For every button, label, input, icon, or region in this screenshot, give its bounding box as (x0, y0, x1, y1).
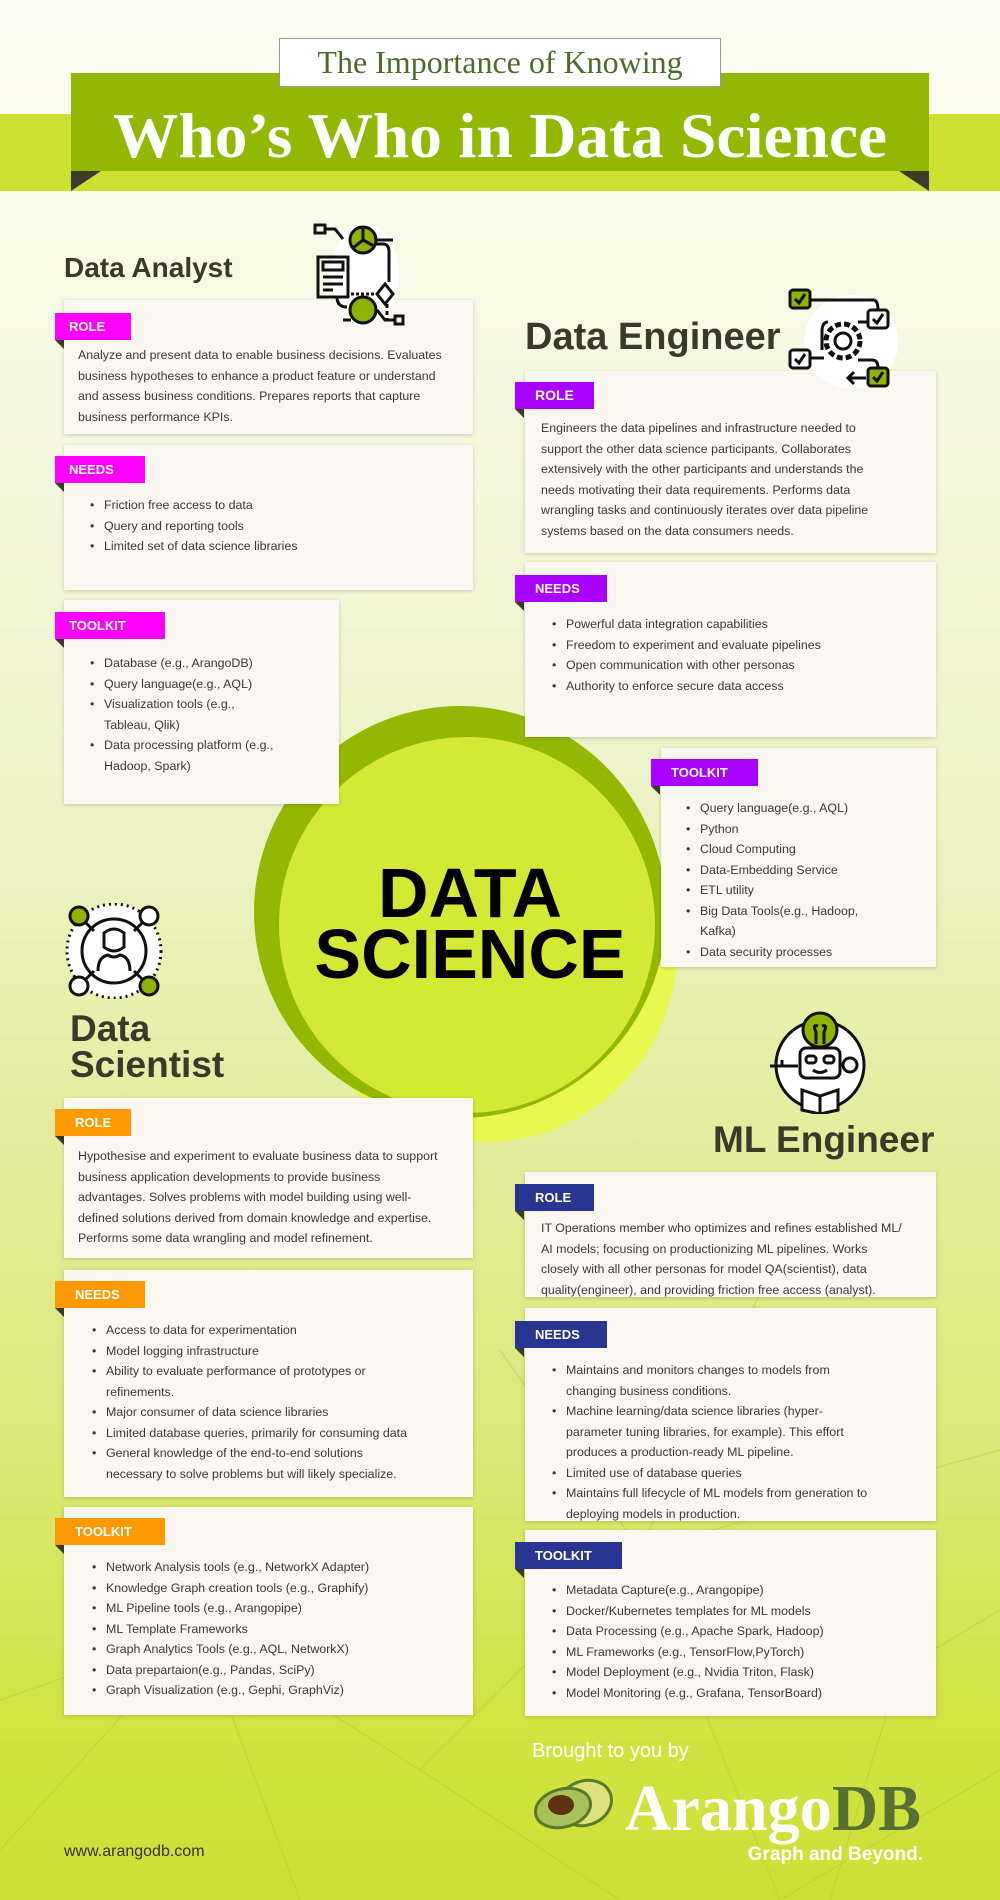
text: scientist role (78, 1149, 438, 1245)
title: Who’s Who in Data Science (113, 100, 887, 171)
tag: scientist role: ROLE (75, 1115, 111, 1130)
list: analyst toolkit: Hadoop, Spark) (104, 758, 191, 772)
text: engineer role: needs motivating their data requirements. Performs data (541, 482, 850, 496)
list: scientist toolkit: Knowledge Graph creation tools (e.g., Graphify) (106, 1580, 368, 1594)
subtitle: The Importance of Knowing (317, 44, 683, 80)
heading: Data Scientist: Scientist (70, 1044, 224, 1085)
list: ML toolkit: Model Deployment (e.g., Nvidia Triton, Flask) (566, 1665, 814, 1679)
tag: ML toolkit: TOOLKIT (535, 1548, 592, 1563)
tag: scientist needs: NEEDS (75, 1287, 120, 1302)
list: ML toolkit: Docker/Kubernetes templates for ML models (566, 1604, 811, 1618)
text: brought to you by: Brought to you by (532, 1740, 689, 1762)
text: engineer role: wrangling tasks and continuously iterates over data pipeline (541, 503, 868, 517)
text: website: www.arangodb.com (64, 1843, 205, 1860)
list: scientist needs: refinements. (106, 1384, 174, 1398)
list: engineer toolkit: ETL utility (700, 883, 754, 897)
logo: ArangoDB: Graph and Beyond. (748, 1844, 923, 1865)
tag: analyst role (55, 313, 131, 340)
list: scientist toolkit: Data prepartaion(e.g., Pandas, SciPy) (106, 1662, 315, 1676)
tag: scientist toolkit: TOOLKIT (75, 1524, 132, 1539)
list: engineer needs (552, 617, 821, 692)
background network lines (0, 1297, 1000, 1900)
panel: engineer needs (525, 562, 936, 737)
tag: engineer toolkit (651, 759, 758, 786)
list: ML toolkit: ML Frameworks (e.g., TensorFlow,PyTorch) (566, 1644, 804, 1658)
panel: ML toolkit (525, 1530, 936, 1716)
list: ML needs: Limited use of database queries (566, 1466, 742, 1480)
panel: analyst role (64, 300, 473, 434)
text: scientist role: defined solutions derived from domain knowledge and expertise. (78, 1210, 431, 1224)
tag: engineer toolkit: TOOLKIT (671, 765, 728, 780)
list: engineer needs: Open communication with other personas (566, 658, 795, 672)
list: ML needs: Maintains full lifecycle of ML models from generation to (566, 1486, 867, 1500)
tag: ML needs: NEEDS (535, 1327, 580, 1342)
icon: data scientist (66, 903, 162, 999)
list: engineer needs: Authority to enforce secure data access (566, 678, 784, 692)
tag: ML toolkit (515, 1542, 622, 1569)
icon: ML engineer robot (770, 1012, 866, 1114)
list: analyst needs: Limited set of data science libraries (104, 539, 298, 553)
list: engineer toolkit: Data security processes (700, 944, 832, 958)
subtitle (279, 38, 721, 87)
list: engineer toolkit: Python (700, 822, 739, 836)
list: engineer toolkit: Cloud Computing (700, 842, 796, 856)
tag: analyst toolkit (55, 612, 165, 639)
list: scientist needs: Access to data for experimentation (106, 1323, 297, 1337)
list: analyst needs (90, 498, 298, 553)
list: ML needs: Machine learning/data science libraries (hyper- (566, 1404, 823, 1418)
list: scientist toolkit (92, 1560, 369, 1697)
panel: scientist needs (64, 1270, 473, 1497)
list: engineer toolkit: Query language(e.g., AQL) (700, 801, 848, 815)
text: analyst role: Analyze and present data to enable business decisions. Evaluates (78, 348, 442, 362)
panel: engineer role (525, 371, 936, 553)
list: scientist needs: Ability to evaluate performance of prototypes or (106, 1364, 366, 1378)
text: scientist role: advantages. Solves problems with model building using well- (78, 1190, 411, 1204)
list: scientist needs (92, 1323, 407, 1480)
heading: Data Analyst: Data Analyst (64, 252, 233, 283)
tag: scientist needs (55, 1281, 145, 1308)
list: engineer toolkit (686, 801, 858, 958)
heading: Data Scientist: Data (70, 1008, 150, 1049)
icon: data analyst flow (314, 224, 404, 326)
text: engineer role: support the other data science participants. Collaborates (541, 442, 851, 456)
tag: analyst needs: NEEDS (69, 462, 114, 477)
list: scientist toolkit: Graph Visualization (e.g., Gephi, GraphViz) (106, 1683, 344, 1697)
list: analyst toolkit: Visualization tools (e.g., (104, 697, 235, 711)
list: analyst toolkit: Query language(e.g., AQL) (104, 676, 252, 690)
tag: analyst role: ROLE (69, 319, 105, 334)
list: engineer toolkit: Kafka) (700, 924, 736, 938)
text: engineer role: Engineers the data pipelines and infrastructure needed to (541, 421, 856, 435)
list: ML needs: deploying models in production. (566, 1506, 740, 1520)
text: scientist role: Performs some data wrangling and model refinement. (78, 1231, 373, 1245)
text: engineer role: systems based on the data consumers needs. (541, 524, 794, 538)
text: analyst role: business hypotheses to enhance a product feature or understand (78, 368, 436, 382)
text: analyst role (78, 348, 442, 424)
tag: analyst toolkit: TOOLKIT (69, 618, 126, 633)
text: analyst role: and assess business conditions. Prepares reports that capture (78, 389, 420, 403)
list: ML needs: produces a production-ready ML pipeline. (566, 1445, 794, 1459)
tag: engineer role (515, 382, 594, 409)
text: ML role: IT Operations member who optimizes and refines established ML/ (541, 1221, 902, 1235)
text: scientist role: business application developments to provide business (78, 1170, 380, 1184)
panel: scientist toolkit (64, 1507, 473, 1715)
tag: scientist toolkit (55, 1518, 165, 1545)
icon: data engineer gear (788, 288, 898, 389)
list: analyst toolkit: Tableau, Qlik) (104, 718, 180, 732)
list: scientist toolkit: Network Analysis tools (e.g., NetworkX Adapter) (106, 1560, 369, 1574)
list: scientist needs: Major consumer of data science libraries (106, 1405, 328, 1419)
text: scientist role: Hypothesise and experiment to evaluate business data to support (78, 1149, 438, 1163)
list: engineer needs: Freedom to experiment and evaluate pipelines (566, 638, 821, 652)
heading: Data Scientist (70, 1008, 224, 1085)
list: analyst needs: Query and reporting tools (104, 518, 244, 532)
list: ML toolkit: Data Processing (e.g., Apache Spark, Hadoop) (566, 1624, 824, 1638)
panel: ML role (525, 1172, 936, 1297)
list: ML toolkit: Model Monitoring (e.g., Grafana, TensorBoard) (566, 1686, 822, 1700)
text: ML role: quality(engineer), and providing friction free access (analyst). (541, 1282, 876, 1296)
list: engineer needs: Powerful data integration capabilities (566, 617, 768, 631)
panel: scientist role (64, 1098, 473, 1258)
list: analyst needs: Friction free access to data (104, 498, 253, 512)
text: ML role: AI models; focusing on productionizing ML pipelines. Works (541, 1242, 867, 1256)
tag: ML role (515, 1184, 594, 1211)
list: scientist needs: Model logging infrastructure (106, 1344, 259, 1358)
list: ML needs (552, 1363, 867, 1520)
list: analyst toolkit: Database (e.g., ArangoDB) (104, 656, 253, 670)
heading: ML Engineer: ML Engineer (713, 1119, 934, 1160)
list: scientist toolkit: Graph Analytics Tools (e.g., AQL, NetworkX) (106, 1642, 349, 1656)
list: scientist toolkit: ML Pipeline tools (e.g., Arangopipe) (106, 1601, 302, 1615)
list: ML toolkit (552, 1583, 824, 1700)
list: engineer toolkit: Big Data Tools(e.g., Hadoop, (700, 904, 858, 918)
central circle: SCIENCE (314, 915, 626, 993)
panel: analyst needs (64, 445, 473, 590)
central circle (254, 706, 676, 1142)
tag: ML role: ROLE (535, 1190, 571, 1205)
header (0, 38, 1000, 191)
list: engineer toolkit: Data-Embedding Service (700, 862, 838, 876)
text: engineer role: extensively with the other participants and understands the (541, 462, 863, 476)
list: scientist needs: Limited database queries, primarily for consuming data (106, 1426, 407, 1440)
list: scientist needs: General knowledge of the end-to-end solutions (106, 1446, 363, 1460)
panel: analyst toolkit (64, 600, 339, 804)
tag: engineer needs (515, 575, 607, 602)
tag: engineer needs: NEEDS (535, 581, 580, 596)
list: ML needs: Maintains and monitors changes to models from (566, 1363, 830, 1377)
list: ML needs: changing business conditions. (566, 1384, 731, 1398)
heading: Data Engineer: Data Engineer (525, 316, 781, 358)
list: scientist toolkit: ML Template Frameworks (106, 1622, 248, 1636)
panel: ML needs (525, 1308, 936, 1521)
tag: ML needs (515, 1321, 607, 1348)
text: analyst role: business performance KPIs. (78, 410, 233, 424)
list: scientist needs: necessary to solve problems but will likely specialize. (106, 1466, 397, 1480)
text: ML role: closely with all other personas for model QA(scientist), data (541, 1262, 867, 1276)
panel: engineer toolkit (661, 748, 936, 967)
tag: engineer role: ROLE (535, 387, 574, 403)
list: ML needs: parameter tuning libraries, for example). This effort (566, 1424, 844, 1438)
text: engineer role (541, 421, 868, 538)
icon: avocado (534, 1778, 613, 1830)
logo: ArangoDB (534, 1772, 923, 1865)
tag: scientist role (55, 1109, 131, 1136)
logo: ArangoDB: ArangoDB (625, 1772, 921, 1845)
tag: analyst needs (55, 456, 145, 483)
list: ML toolkit: Metadata Capture(e.g., Arangopipe) (566, 1583, 764, 1597)
list: analyst toolkit: Data processing platform (e.g., (104, 738, 273, 752)
text: ML role (541, 1221, 902, 1296)
central circle: DATA (378, 854, 562, 932)
list: analyst toolkit (90, 656, 273, 772)
